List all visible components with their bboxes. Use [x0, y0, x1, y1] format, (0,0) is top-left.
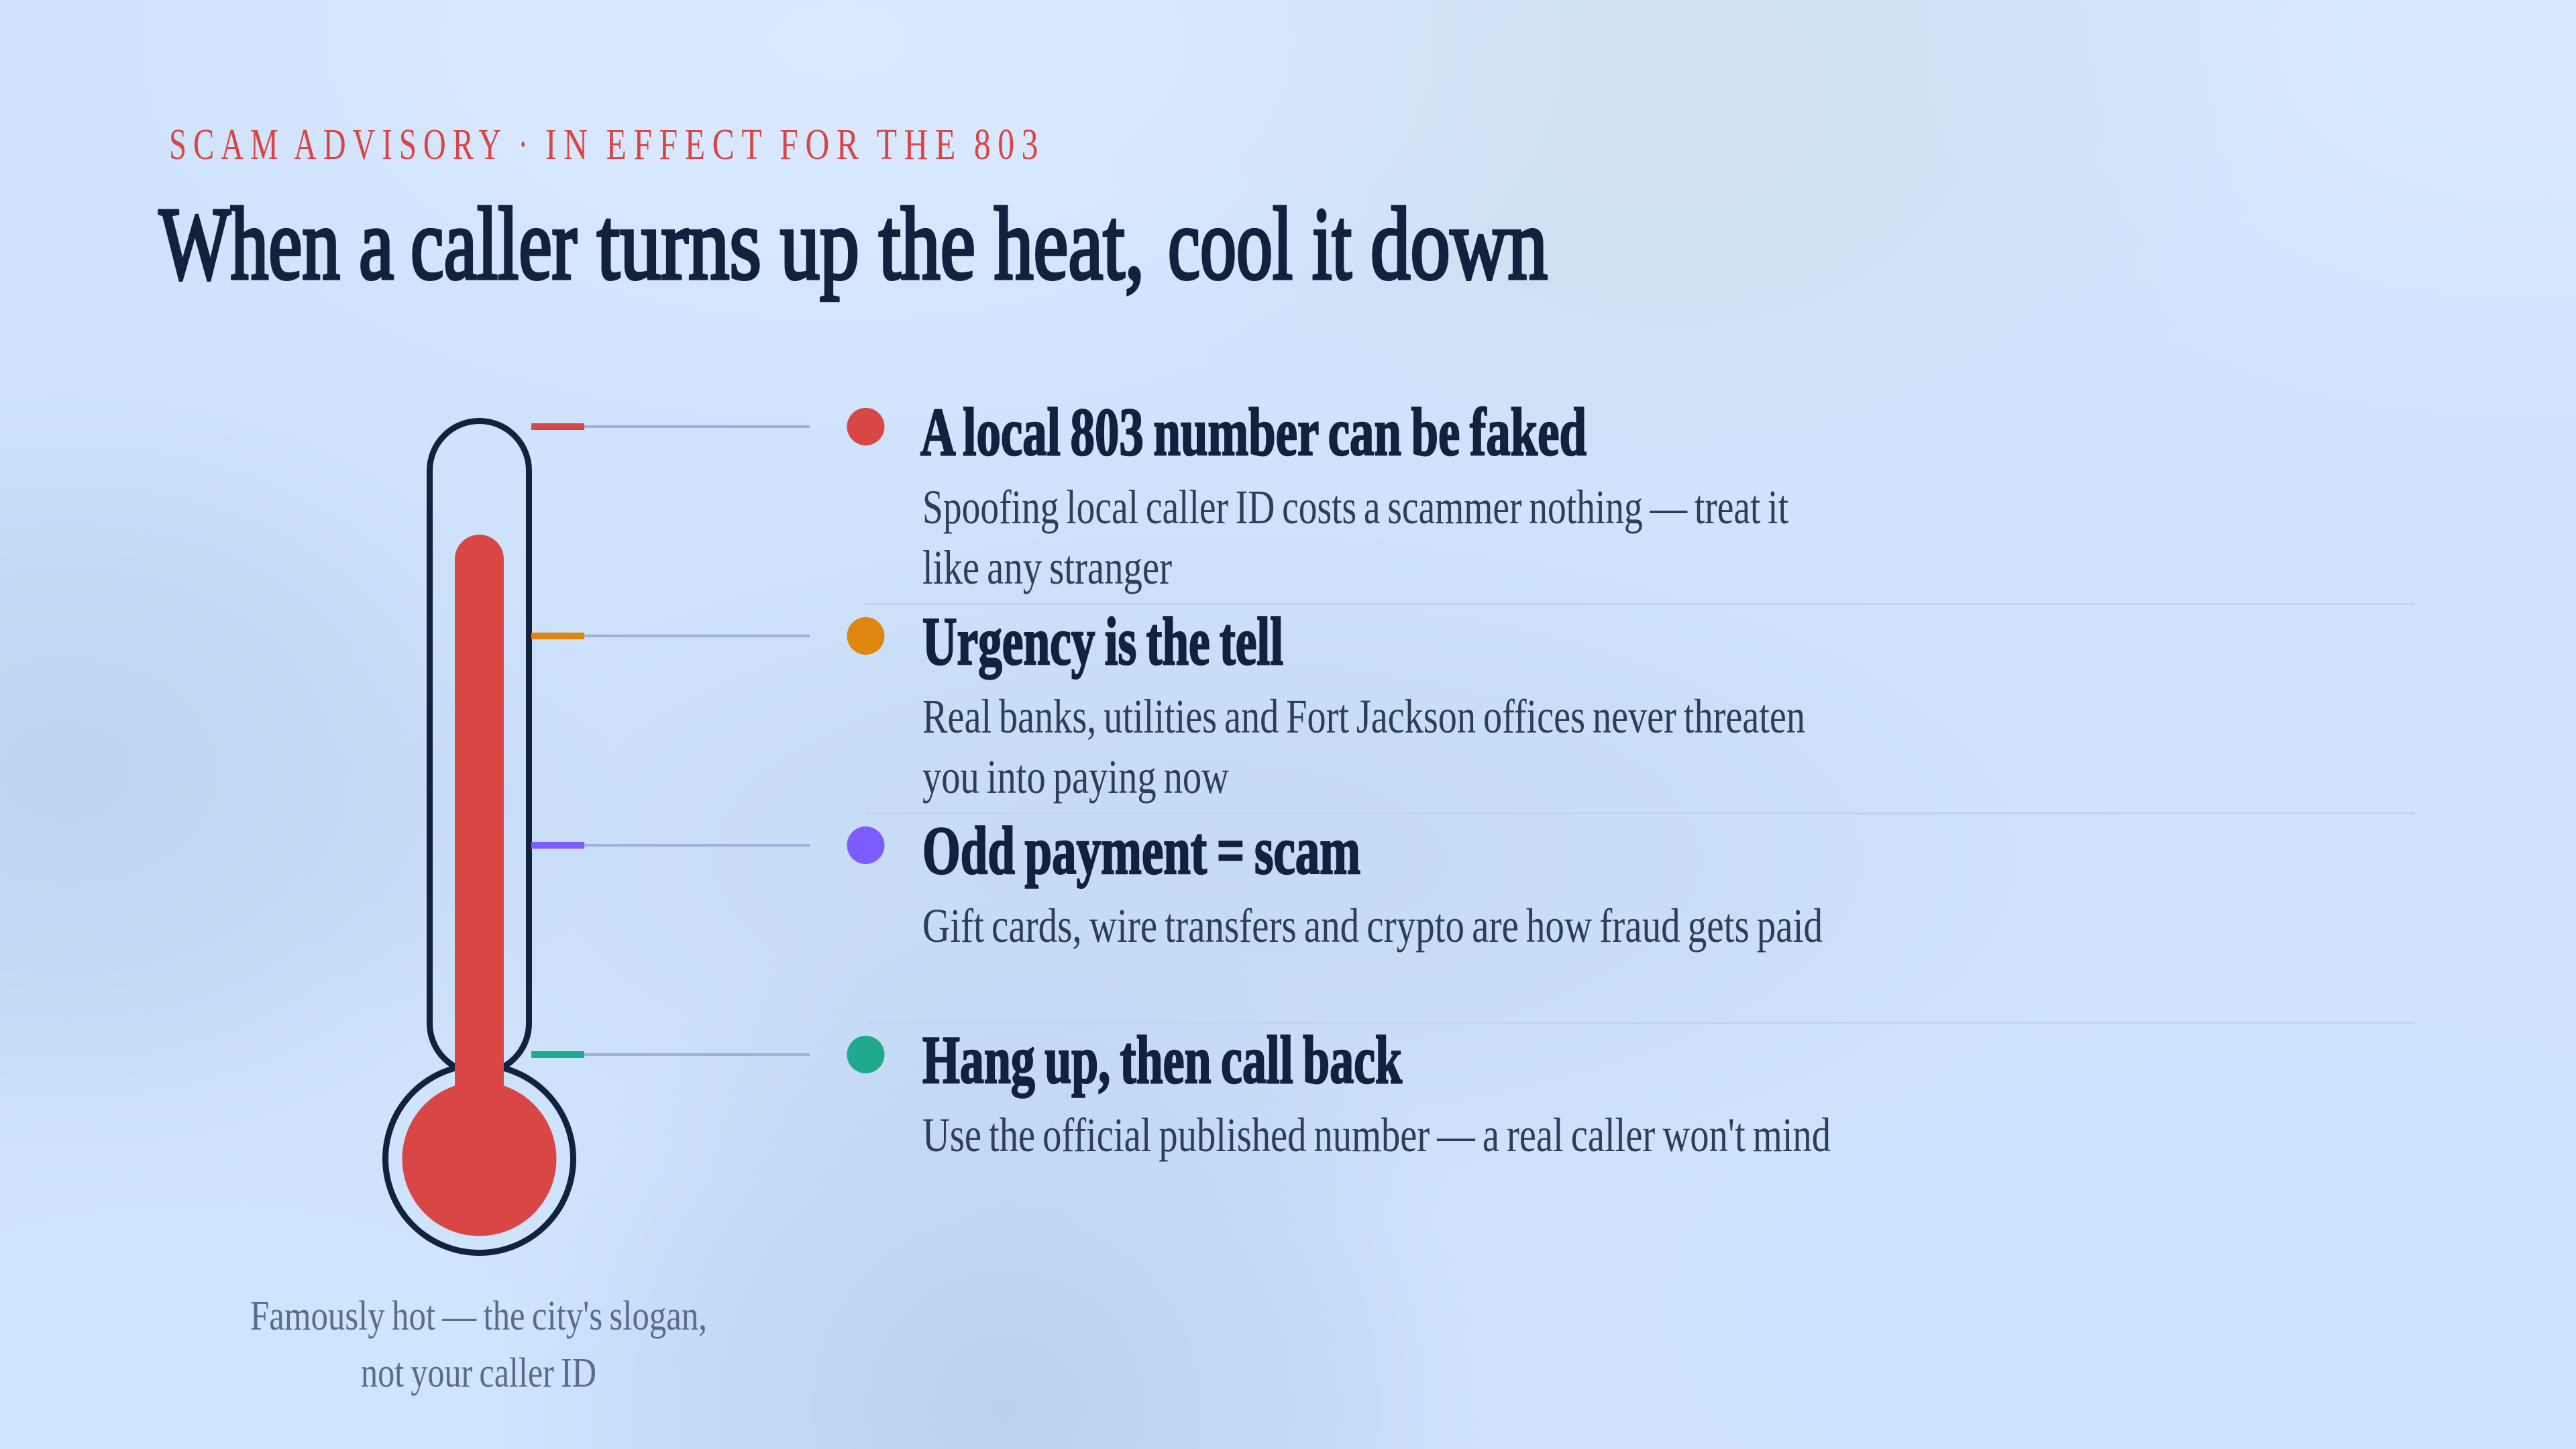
body text: Gift cards, wire transfers and crypto are how fraud gets paid	[922, 899, 1823, 953]
thermometer	[385, 421, 573, 1253]
thermometer caption	[250, 1293, 707, 1396]
tick: orange	[531, 633, 584, 639]
mercury column	[455, 535, 504, 1112]
item 4: hang up	[531, 1022, 1831, 1162]
leader line	[584, 844, 810, 847]
divider lines	[865, 603, 2415, 1024]
eyebrow: SCAM ADVISORY	[169, 120, 508, 169]
title: When	[159, 187, 340, 301]
mercury bulb	[402, 1081, 557, 1236]
dot: purple	[847, 826, 884, 864]
body text: Spoofing local caller ID costs a scammer nothing — treat it	[922, 480, 1788, 534]
title: down	[1371, 187, 1548, 301]
body text: Real banks, utilities and Fort Jackson offices never threaten	[922, 690, 1805, 743]
tick: green	[531, 1051, 584, 1058]
title: heat,	[994, 187, 1144, 301]
leader line	[584, 425, 810, 428]
dot: red	[847, 408, 884, 445]
heading: Hang up, then call back	[922, 1022, 1402, 1098]
eyebrow: ·	[519, 120, 533, 169]
item 2: urgency	[531, 604, 1805, 804]
heading: A local 803 number can be faked	[920, 394, 1587, 470]
title: a	[359, 187, 394, 301]
thermometer caption: not your caller ID	[361, 1350, 596, 1396]
body text: Use the official published number — a real caller won't mind	[922, 1108, 1831, 1162]
title: turns	[597, 187, 761, 301]
thermometer tube	[429, 421, 529, 1073]
thermometer bulb outline	[385, 1065, 573, 1253]
title: up	[780, 187, 859, 301]
leader line	[584, 635, 810, 637]
tick: red	[531, 423, 584, 430]
body text: you into paying now	[922, 750, 1229, 804]
eyebrow	[169, 120, 1045, 169]
title: caller	[411, 187, 577, 301]
title: the	[879, 187, 975, 301]
title	[159, 187, 1548, 301]
body text	[922, 480, 1788, 594]
dot: orange	[847, 617, 884, 655]
thermometer caption: Famously hot — the city's slogan,	[250, 1293, 707, 1339]
leader line	[584, 1053, 810, 1056]
eyebrow: IN EFFECT FOR THE 803	[545, 120, 1045, 169]
dot: green	[847, 1036, 884, 1073]
title: cool	[1168, 187, 1293, 301]
body text: like any stranger	[922, 541, 1172, 594]
title: it	[1312, 187, 1352, 301]
heading: Urgency is the tell	[922, 604, 1283, 680]
tick: purple	[531, 842, 584, 849]
heading: Odd payment = scam	[922, 813, 1360, 889]
body text	[922, 690, 1805, 804]
item 1: faked number	[531, 394, 1788, 594]
item 3: odd payment	[531, 813, 1823, 953]
